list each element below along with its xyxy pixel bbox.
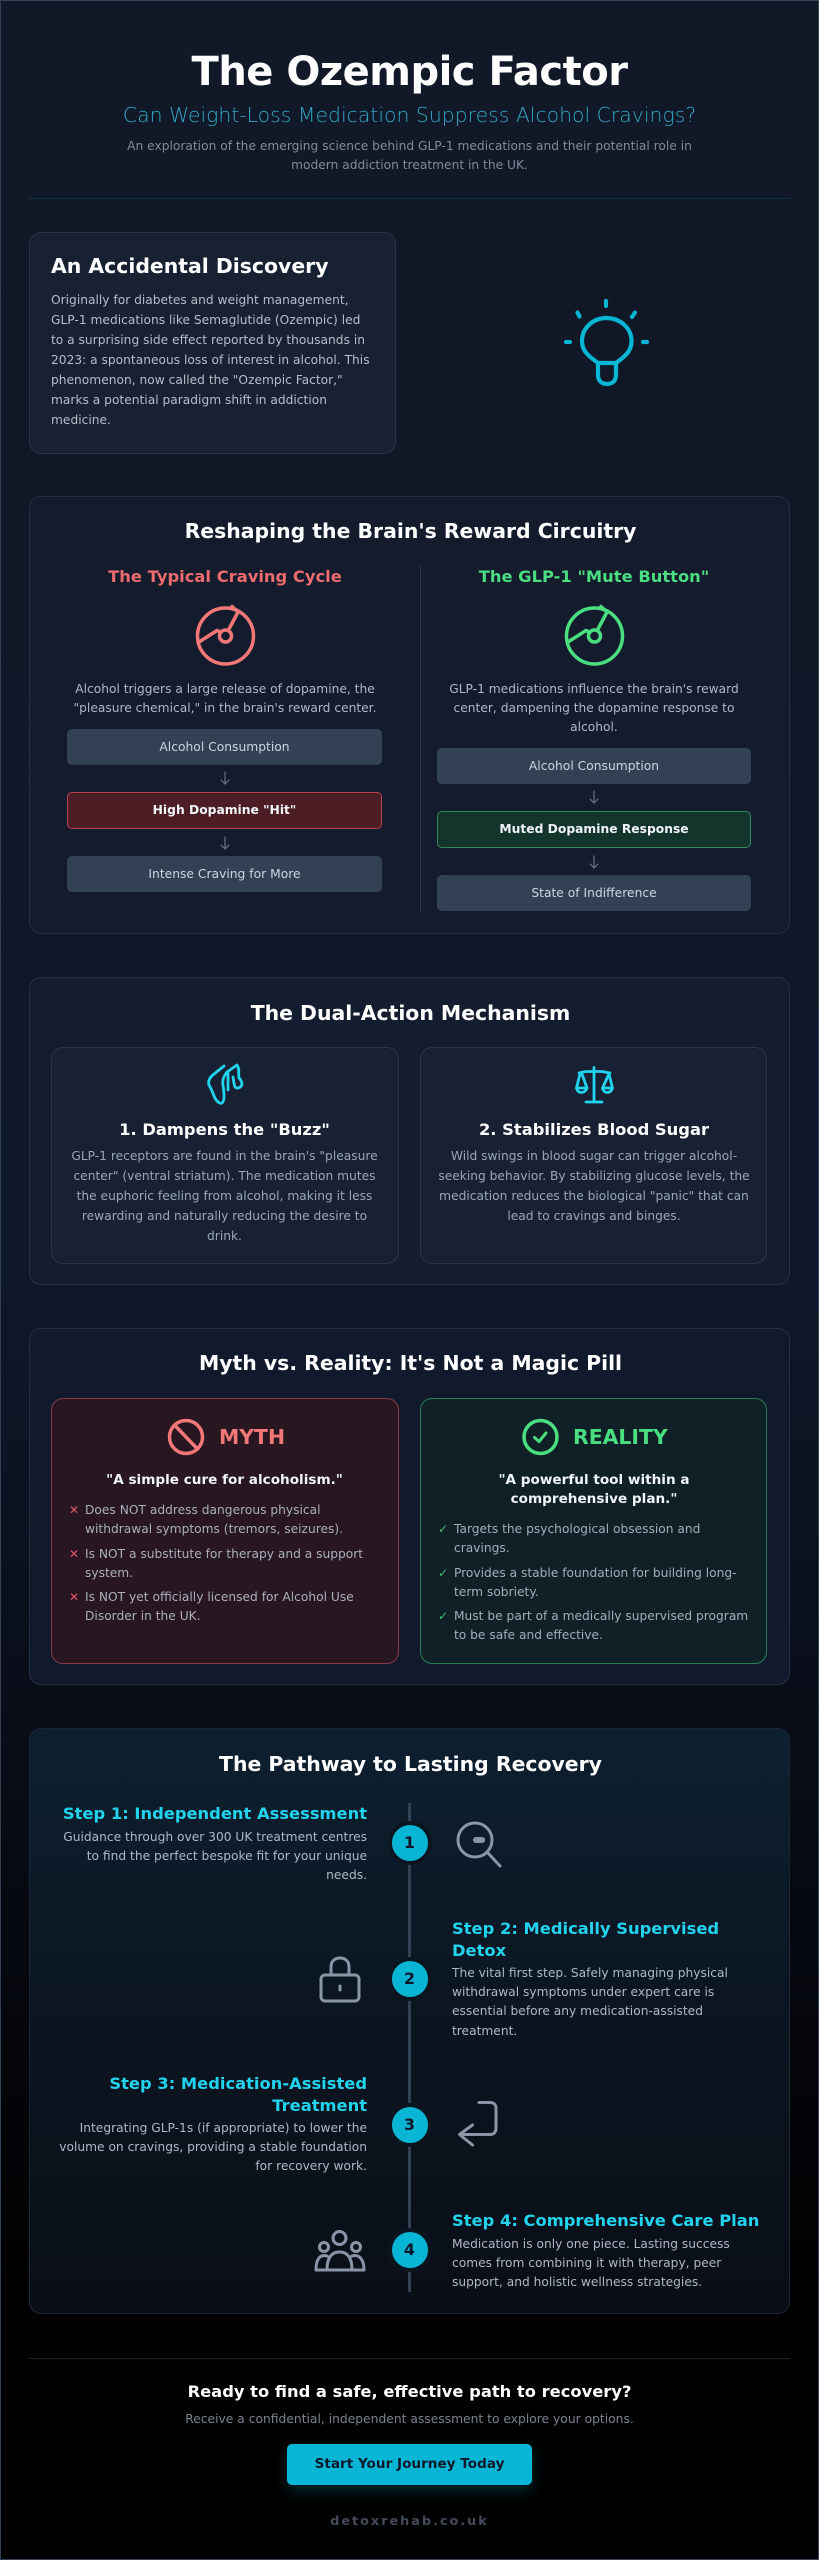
right text: center, dampening the dopamine response to bbox=[454, 701, 734, 715]
step 2 heading: Detox bbox=[452, 1941, 506, 1960]
reality list: to be safe and effective. bbox=[454, 1628, 603, 1642]
right flow step 1: Alcohol Consumption bbox=[529, 759, 659, 773]
text block: Originally for diabetes and weight management, bbox=[51, 293, 349, 307]
left flow step 1: Alcohol Consumption bbox=[159, 740, 290, 754]
card: dampens the buzz bbox=[51, 1047, 399, 1264]
intro text bbox=[127, 139, 692, 172]
step 1 body: needs. bbox=[326, 1868, 367, 1882]
icon: check circle bbox=[524, 1420, 557, 1454]
step 1 text bbox=[63, 1804, 367, 1882]
myth list: system. bbox=[85, 1566, 133, 1580]
node 1 bbox=[388, 1821, 432, 1865]
header divider bbox=[29, 198, 790, 199]
step 2 heading: Step 2: Medically Supervised bbox=[452, 1919, 719, 1938]
step 3 heading: Treatment bbox=[272, 2096, 367, 2115]
heading: The Dual-Action Mechanism bbox=[251, 1001, 570, 1025]
right heading: The GLP-1 "Mute Button" bbox=[479, 567, 709, 586]
panel: accidental discovery bbox=[29, 232, 396, 454]
card text: GLP-1 receptors are found in the brain's "pleasure bbox=[71, 1149, 378, 1163]
reality quote: comprehensive plan." bbox=[511, 1491, 677, 1507]
left heading: The Typical Craving Cycle bbox=[108, 567, 342, 586]
icon: people bbox=[316, 2232, 364, 2270]
step 3 body: volume on cravings, providing a stable foundation bbox=[59, 2140, 367, 2154]
myth list: ✕ bbox=[69, 1590, 79, 1604]
card heading: 1. Dampens the "Buzz" bbox=[119, 1120, 330, 1139]
step 2 body bbox=[452, 1966, 728, 2038]
icon: return arrow bbox=[460, 2102, 496, 2145]
step 3 body: Integrating GLP-1s (if appropriate) to lower the bbox=[80, 2121, 367, 2135]
card: reality bbox=[420, 1398, 767, 1664]
myth list: Is NOT yet officially licensed for Alcohol Use bbox=[85, 1590, 354, 1604]
card text: Wild swings in blood sugar can trigger alcohol- bbox=[451, 1149, 737, 1163]
text block: medicine. bbox=[51, 413, 111, 427]
icon: lock bbox=[321, 1958, 359, 2001]
step 3 text bbox=[59, 2074, 367, 2173]
left flow step 3 bbox=[67, 856, 382, 892]
cta text: Receive a confidential, independent assessment to explore your options. bbox=[185, 2412, 634, 2426]
heading: Reshaping the Brain's Reward Circuitry bbox=[185, 519, 636, 543]
arrow: left 1 bbox=[221, 772, 229, 784]
myth list: ✕ bbox=[69, 1547, 79, 1561]
step 4 body: Medication is only one piece. Lasting success bbox=[452, 2237, 730, 2251]
icon: lightbulb bbox=[564, 298, 650, 386]
step 2 body: The vital first step. Safely managing physical bbox=[452, 1966, 728, 1980]
step 3 body: for recovery work. bbox=[255, 2159, 367, 2173]
step 3 body bbox=[59, 2121, 367, 2173]
reality list: Must be part of a medically supervised program bbox=[454, 1609, 748, 1623]
right text bbox=[449, 682, 739, 734]
icons: brain and scales bbox=[207, 1064, 614, 1105]
arrow: right 2 bbox=[590, 856, 598, 868]
node 4: 4 bbox=[404, 2240, 415, 2259]
myth list: Disorder in the UK. bbox=[85, 1609, 201, 1623]
cta heading: Ready to find a safe, effective path to recovery? bbox=[188, 2382, 631, 2401]
right flow step 3: State of Indifference bbox=[531, 886, 657, 900]
heading: Myth vs. Reality: It's Not a Magic Pill bbox=[199, 1351, 622, 1375]
right flow step 1 bbox=[437, 748, 751, 784]
node 2 bbox=[388, 1957, 432, 2001]
button bbox=[287, 2444, 532, 2485]
myth quote: "A simple cure for alcoholism." bbox=[106, 1472, 343, 1488]
left flow step 2: High Dopamine "Hit" bbox=[153, 803, 296, 817]
step 1 body bbox=[63, 1830, 367, 1882]
reality list: Targets the psychological obsession and bbox=[454, 1522, 700, 1536]
step 2 text bbox=[452, 1919, 728, 2038]
reality list: ✓ bbox=[438, 1609, 448, 1623]
step 1 body: to find the perfect bespoke fit for your unique bbox=[87, 1849, 367, 1863]
panel: reward circuitry bbox=[29, 496, 790, 934]
subtitle: Can Weight-Loss Medication Suppress Alcohol Cravings? bbox=[123, 103, 696, 127]
node 2: 2 bbox=[404, 1969, 415, 1988]
panel: dual-action mechanism bbox=[29, 977, 790, 1285]
node 3: 3 bbox=[404, 2115, 415, 2134]
reality quote bbox=[498, 1472, 690, 1507]
card text: the euphoric feeling from alcohol, making it less bbox=[77, 1189, 372, 1203]
reality label: REALITY bbox=[573, 1425, 668, 1449]
right flow step 3 bbox=[437, 875, 751, 911]
step 3 heading bbox=[109, 2074, 367, 2115]
intro text: An exploration of the emerging science behind GLP-1 medications and their potential role in bbox=[127, 139, 692, 153]
card: myth bbox=[51, 1398, 399, 1664]
reality list: ✓ bbox=[438, 1522, 448, 1536]
card text: rewarding and naturally reducing the desire to bbox=[82, 1209, 367, 1223]
step 4 text bbox=[452, 2211, 759, 2289]
reality list: cravings. bbox=[454, 1541, 510, 1555]
card text: lead to cravings and binges. bbox=[507, 1209, 681, 1223]
myth label: MYTH bbox=[219, 1425, 285, 1449]
title: The Ozempic Factor bbox=[192, 49, 627, 95]
card text bbox=[438, 1149, 750, 1223]
myth list: withdrawal symptoms (tremors, seizures). bbox=[85, 1522, 343, 1536]
panel: pathway to recovery bbox=[29, 1728, 790, 2314]
reality quote: "A powerful tool within a bbox=[498, 1472, 690, 1488]
step 1 body: Guidance through over 300 UK treatment centres bbox=[63, 1830, 367, 1844]
reality list: term sobriety. bbox=[454, 1585, 539, 1599]
step 4 body bbox=[452, 2237, 730, 2289]
left flow step 1 bbox=[67, 729, 382, 765]
footer divider bbox=[29, 2358, 790, 2359]
reality list: Provides a stable foundation for building long- bbox=[454, 1566, 737, 1580]
myth list: ✕ bbox=[69, 1503, 79, 1517]
card text: drink. bbox=[207, 1229, 242, 1243]
icon: prohibited bbox=[170, 1420, 202, 1454]
step 2 heading bbox=[452, 1919, 719, 1960]
timeline line bbox=[408, 1803, 411, 2292]
arrow: left 2 bbox=[221, 837, 229, 849]
button: Start Your Journey Today bbox=[315, 2456, 504, 2472]
reality list: ✓ bbox=[438, 1566, 448, 1580]
right text: alcohol. bbox=[570, 720, 618, 734]
panel: myth vs reality bbox=[29, 1328, 790, 1685]
column divider bbox=[420, 566, 421, 913]
reality list bbox=[438, 1522, 748, 1642]
myth list: Does NOT address dangerous physical bbox=[85, 1503, 321, 1517]
text block: phenomenon, now called the "Ozempic Factor," bbox=[51, 373, 343, 387]
icons: myth and reality bbox=[168, 1418, 559, 1456]
card text bbox=[71, 1149, 378, 1243]
step 4 body: support, and holistic wellness strategies. bbox=[452, 2275, 702, 2289]
icon: magnifier bbox=[458, 1823, 500, 1866]
step 2 body: treatment. bbox=[452, 2024, 517, 2038]
text block: GLP-1 medications like Semaglutide (Ozempic) led bbox=[51, 313, 360, 327]
myth list bbox=[69, 1503, 363, 1623]
step 2 body: withdrawal symptoms under expert care is bbox=[452, 1985, 714, 1999]
icon: scales bbox=[576, 1068, 612, 1102]
left text: "pleasure chemical," in the brain's reward center. bbox=[74, 701, 376, 715]
call to action bbox=[185, 2382, 634, 2529]
step 4 heading: Step 4: Comprehensive Care Plan bbox=[452, 2211, 759, 2230]
left text: Alcohol triggers a large release of dopamine, the bbox=[75, 682, 375, 696]
step 3 heading: Step 3: Medication-Assisted bbox=[109, 2074, 367, 2093]
arrow: right 1 bbox=[590, 791, 598, 803]
card: stabilizes blood sugar bbox=[420, 1047, 767, 1264]
flow arrows and gauges bbox=[196, 604, 624, 869]
text block bbox=[51, 293, 370, 427]
node 3 bbox=[388, 2103, 432, 2147]
icon: brain bbox=[209, 1065, 242, 1103]
node 1: 1 bbox=[404, 1833, 415, 1852]
right text: GLP-1 medications influence the brain's reward bbox=[449, 682, 739, 696]
card text: medication reduces the biological "panic" that can bbox=[439, 1189, 749, 1203]
right flow step 2: Muted Dopamine Response bbox=[499, 822, 689, 836]
text block: marks a potential paradigm shift in addiction bbox=[51, 393, 327, 407]
step 2 body: essential before any medication-assisted bbox=[452, 2004, 703, 2018]
card heading: 2. Stabilizes Blood Sugar bbox=[479, 1120, 709, 1139]
left flow step 2 bbox=[67, 792, 382, 829]
heading: An Accidental Discovery bbox=[51, 254, 328, 278]
text block: to a surprising side effect reported by thousands in bbox=[51, 333, 365, 347]
card text: center" (ventral striatum). The medication mutes bbox=[73, 1169, 376, 1183]
left flow step 3: Intense Craving for More bbox=[148, 867, 301, 881]
left text bbox=[74, 682, 376, 715]
step 4 body: comes from combining it with therapy, peer bbox=[452, 2256, 721, 2270]
heading: The Pathway to Lasting Recovery bbox=[219, 1752, 602, 1776]
text block: 2023: a spontaneous loss of interest in alcohol. This bbox=[51, 353, 370, 367]
icon: green gauge bbox=[566, 606, 622, 664]
website: detoxrehab.co.uk bbox=[330, 2514, 489, 2529]
card text: seeking behavior. By stabilizing glucose levels, the bbox=[438, 1169, 750, 1183]
step 1 heading: Step 1: Independent Assessment bbox=[63, 1804, 367, 1823]
right flow step 2 bbox=[437, 811, 751, 848]
intro text: modern addiction treatment in the UK. bbox=[291, 158, 528, 172]
header bbox=[123, 49, 696, 172]
node 4 bbox=[388, 2228, 432, 2272]
icon: red gauge bbox=[198, 606, 254, 664]
myth list: Is NOT a substitute for therapy and a support bbox=[85, 1547, 363, 1561]
